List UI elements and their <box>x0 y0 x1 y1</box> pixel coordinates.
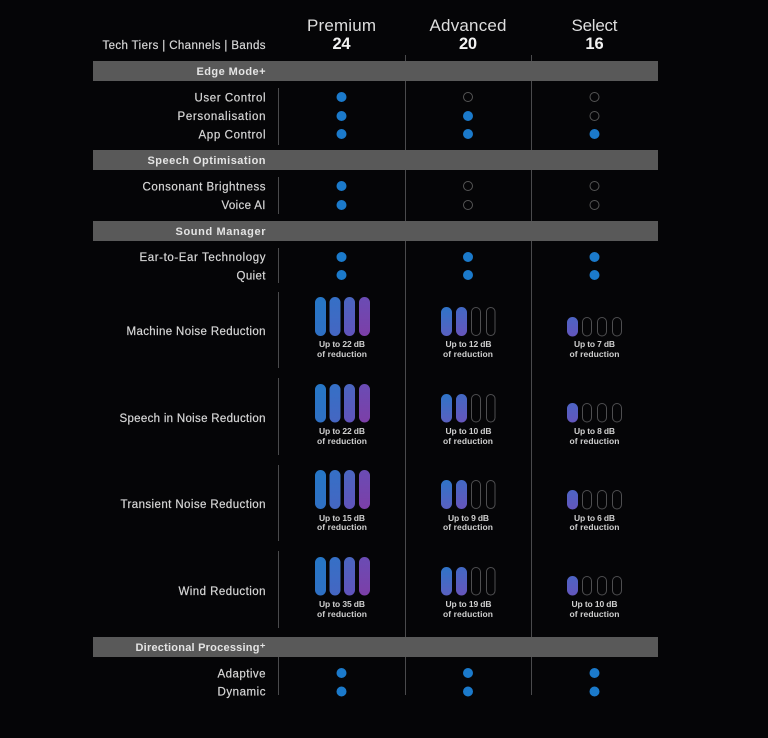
premium bars: Up to 35 dB <box>319 599 365 609</box>
select bars: Up to 10 dB <box>572 599 618 609</box>
row: Machine Noise Reduction <box>126 297 622 359</box>
row: Dynamic: Dynamic <box>218 686 266 698</box>
tier: Select 16 <box>572 16 618 53</box>
row: Speech in Noise Reduction: Speech in Noise Reduction <box>120 413 266 425</box>
column divider lines <box>278 55 532 695</box>
select bars: of reduction <box>570 609 620 619</box>
premium bars: Up to 22 dB <box>319 339 365 349</box>
section: Directional Processing <box>93 637 658 698</box>
row: Personalisation: Personalisation <box>178 111 266 123</box>
tier: Select 16: 16 <box>585 35 604 53</box>
row: Wind Reduction: Wind Reduction <box>178 586 266 598</box>
premium bars: of reduction <box>317 436 367 446</box>
heading band <box>93 637 658 657</box>
premium bars <box>315 384 370 446</box>
section: Sound Manager <box>93 221 658 619</box>
select bars <box>567 490 622 532</box>
row: Voice AI <box>222 200 599 212</box>
advanced bars: Up to 12 dB <box>446 339 492 349</box>
tier: Advanced 20: 20 <box>459 35 477 53</box>
advanced bars: of reduction <box>443 349 493 359</box>
heading band <box>93 150 658 170</box>
advanced bars: of reduction <box>443 609 493 619</box>
row: User Control <box>194 92 599 104</box>
select bars: Up to 6 dB <box>574 513 615 523</box>
premium bars <box>315 557 370 619</box>
premium bars: of reduction <box>317 609 367 619</box>
select bars <box>567 576 622 619</box>
heading band: Sound Manager <box>176 226 266 238</box>
tier: Select 16: Select <box>572 16 618 35</box>
tier: Advanced 20: Advanced <box>430 16 506 35</box>
row: Transient Noise Reduction: Transient Noise Reduction <box>120 499 266 511</box>
row: Quiet <box>236 270 600 282</box>
row: Consonant Brightness <box>142 181 599 194</box>
section: Speech Optimisation <box>93 150 658 212</box>
tier: Premium 24: Premium <box>307 16 376 35</box>
tech tiers label: Tech Tiers | Channels | Bands <box>102 40 266 52</box>
row: Adaptive <box>218 668 600 680</box>
row: Personalisation <box>178 111 599 123</box>
heading band: Directional Processing⁺ <box>136 642 266 654</box>
premium bars <box>315 470 370 532</box>
premium bars: Up to 15 dB <box>319 513 365 523</box>
heading band <box>93 221 658 241</box>
advanced bars: Up to 10 dB <box>446 426 492 436</box>
select bars <box>567 317 622 359</box>
advanced bars <box>441 480 495 532</box>
row: Transient Noise Reduction <box>120 470 622 532</box>
row: Adaptive: Adaptive <box>218 668 266 680</box>
row: Wind Reduction <box>178 557 622 619</box>
advanced bars: Up to 19 dB <box>446 599 492 609</box>
row: Dynamic <box>218 686 600 698</box>
premium bars <box>315 297 370 359</box>
heading band: Speech Optimisation <box>148 155 266 167</box>
row: App Control <box>198 129 600 142</box>
row: Quiet: Quiet <box>236 270 266 282</box>
advanced bars: of reduction <box>443 522 493 532</box>
heading band: Edge Mode+ <box>196 66 266 78</box>
advanced bars: of reduction <box>443 436 493 446</box>
tier: Premium 24: 24 <box>332 35 351 53</box>
select bars: of reduction <box>570 436 620 446</box>
advanced bars <box>441 394 495 446</box>
tier: Premium 24 <box>307 16 376 53</box>
row: Voice AI: Voice AI <box>222 200 266 212</box>
row: Machine Noise Reduction: Machine Noise Reduction <box>126 326 266 338</box>
header row <box>102 16 618 53</box>
row: Speech in Noise Reduction <box>120 384 622 446</box>
advanced bars: Up to 9 dB <box>448 513 489 523</box>
select bars: Up to 8 dB <box>574 426 615 436</box>
premium bars: of reduction <box>317 349 367 359</box>
premium bars: Up to 22 dB <box>319 426 365 436</box>
select bars: of reduction <box>570 522 620 532</box>
tier: Advanced 20 <box>430 16 506 53</box>
heading band <box>93 61 658 81</box>
row: App Control: App Control <box>198 130 266 142</box>
section: Edge Mode+ <box>93 61 658 142</box>
advanced bars <box>441 307 495 359</box>
premium bars: of reduction <box>317 522 367 532</box>
advanced bars <box>441 567 495 619</box>
select bars: Up to 7 dB <box>574 339 615 349</box>
row: Ear-to-Ear Technology: Ear-to-Ear Technology <box>140 252 266 264</box>
select bars <box>567 403 622 446</box>
select bars: of reduction <box>570 349 620 359</box>
row: User Control: User Control <box>194 92 266 104</box>
row: Consonant Brightness: Consonant Brightness <box>142 182 266 194</box>
row: Ear-to-Ear Technology <box>140 252 600 264</box>
